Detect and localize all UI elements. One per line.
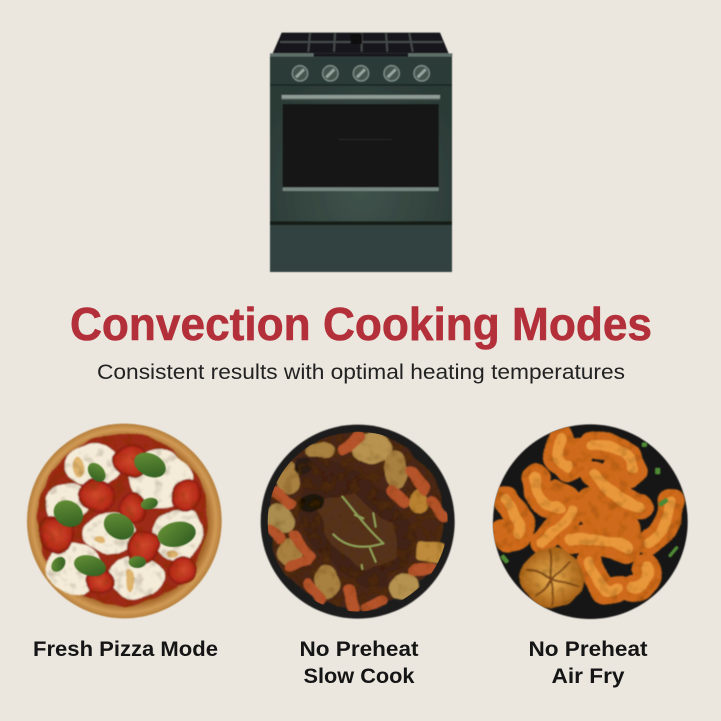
- roasted garlic: [520, 548, 583, 608]
- thyme garnish: [333, 497, 383, 569]
- mozzarella slices: [46, 444, 204, 598]
- melted cheese browning: [73, 457, 178, 592]
- label: no preheat air fry: [528, 637, 648, 688]
- pot roast photo: [261, 425, 455, 619]
- label: no preheat air fry: No Preheat: [528, 637, 648, 661]
- oven body: [270, 57, 452, 272]
- pizza photo: [27, 424, 222, 618]
- oven door handle: [282, 95, 440, 100]
- beef roast: [295, 457, 418, 588]
- potatoes: [262, 433, 446, 601]
- cooktop grates: [270, 33, 452, 57]
- label: no preheat air fry: Air Fry: [552, 664, 625, 688]
- label: no preheat slow cook: [300, 637, 418, 688]
- control panel with knobs: [270, 57, 452, 86]
- oven window: [283, 104, 439, 191]
- oven range illustration: [270, 33, 452, 272]
- tomato slices: [36, 445, 202, 596]
- shrimp: [502, 438, 672, 592]
- basil leaves: [48, 448, 198, 580]
- herb garnish: [500, 442, 679, 564]
- shrimp skillet photo: [493, 424, 688, 619]
- title: Convection Cooking Modes: [70, 298, 652, 350]
- carrots: [268, 436, 445, 607]
- storage drawer: [270, 221, 452, 272]
- subtitle: Consistent results with optimal heating temperatures: [97, 360, 625, 384]
- label: no preheat slow cook: No Preheat: [300, 637, 418, 661]
- label: no preheat slow cook: Slow Cook: [304, 664, 415, 688]
- label: fresh pizza mode: Fresh Pizza Mode: [33, 637, 218, 661]
